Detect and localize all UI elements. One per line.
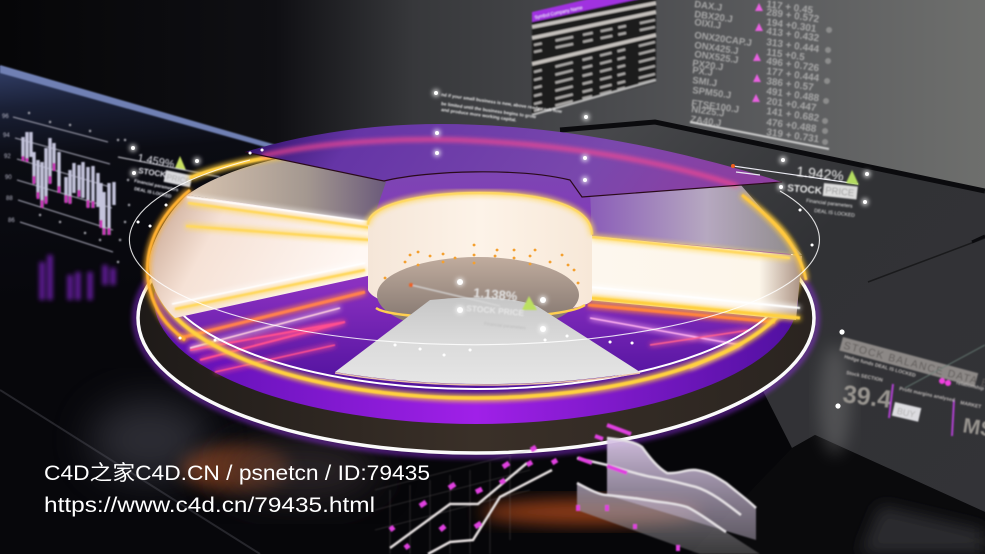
axis labels: 94 bbox=[3, 133, 10, 139]
leader bbox=[411, 285, 500, 306]
bottom left line charts bbox=[375, 447, 557, 554]
line 3: and produce more working capital. bbox=[441, 107, 517, 123]
bottom rule bbox=[532, 80, 656, 115]
grid dots bbox=[29, 113, 129, 262]
magenta points bbox=[390, 447, 557, 548]
values: 289 + 0.572 bbox=[766, 7, 820, 25]
values: 476 +0.488 bbox=[766, 117, 817, 135]
header text: Symbol Company Name bbox=[534, 5, 583, 20]
values: 319 + 0.731 bbox=[766, 127, 820, 145]
dotted orbit ring bbox=[129, 150, 819, 355]
status circles bbox=[825, 30, 829, 142]
names: SPM50.J bbox=[692, 85, 732, 101]
watermark line one: C4D之家C4D.CN / psnetcn / ID:79435 bbox=[44, 462, 430, 485]
slice: right edge lines bbox=[590, 195, 806, 318]
area line two bbox=[577, 458, 741, 515]
stock text: STOCK bbox=[138, 166, 167, 179]
reflected candles bbox=[42, 255, 113, 300]
chart grid bbox=[375, 450, 530, 554]
inner cylinder bbox=[368, 192, 592, 333]
watermark bbox=[44, 462, 430, 517]
glow markers bbox=[130, 90, 870, 409]
left candlestick chart bbox=[2, 113, 129, 262]
table body bbox=[532, 0, 656, 116]
caption: Financial parameters bbox=[484, 321, 527, 330]
slice: left cream face bbox=[149, 195, 372, 318]
subtitle: Hedge funds DEAL IS LOCKED bbox=[843, 354, 917, 379]
names: SMI.J bbox=[692, 75, 718, 89]
market label: MARKET bbox=[960, 400, 982, 410]
magenta marker bbox=[942, 381, 948, 383]
names: ONX20CAP.J bbox=[694, 30, 752, 49]
line 2: be limited until the business begins to grow bbox=[441, 101, 537, 119]
thin diagonal line bbox=[905, 345, 985, 388]
white cylinder ring bbox=[376, 305, 585, 318]
stock balance panel bbox=[839, 337, 985, 442]
slice: left top face bbox=[187, 156, 386, 222]
up triangle bbox=[522, 296, 537, 310]
trailing label: relationship bbox=[956, 380, 985, 392]
candles bbox=[23, 132, 114, 235]
leader line bbox=[118, 157, 220, 177]
leader line bbox=[733, 166, 858, 184]
values: 496 + 0.726 bbox=[766, 56, 820, 74]
watermark line two: https://www.c4d.cn/79435.html bbox=[44, 494, 375, 517]
magenta triangles bbox=[752, 3, 763, 102]
panel: right floor plate bbox=[560, 122, 985, 512]
small caption: Financial parameters bbox=[134, 178, 179, 192]
data table bbox=[532, 0, 662, 116]
white trapezoid slice bbox=[335, 298, 640, 385]
axis labels: 86 bbox=[8, 218, 15, 224]
value: 1.459% bbox=[136, 152, 176, 171]
stock text: STOCK bbox=[787, 183, 823, 197]
value: 1.942% bbox=[796, 163, 845, 184]
stock text: STOCK PRICE bbox=[466, 303, 525, 318]
inner well bbox=[377, 257, 579, 333]
up triangle bbox=[846, 170, 859, 185]
orbit dots bbox=[138, 150, 812, 355]
line 1: nd if your small business is new, above ready cash flow bbox=[441, 92, 563, 114]
bottom right area charts bbox=[577, 425, 760, 554]
small caption: Financial parameters bbox=[806, 198, 853, 210]
disc: floor glow lines bbox=[180, 292, 775, 372]
top purple slice bbox=[245, 124, 858, 197]
slice: left edge lines bbox=[147, 155, 372, 340]
profit label: Profit margins analysed bbox=[899, 386, 955, 404]
axis labels: 90 bbox=[5, 175, 12, 181]
names bbox=[690, 0, 752, 129]
candle bases bbox=[23, 156, 109, 235]
disc: base rim bbox=[138, 183, 814, 453]
names: DBX20.J bbox=[694, 9, 733, 25]
disc: purple floor bbox=[154, 146, 798, 398]
names: ONX525.J bbox=[694, 49, 739, 66]
orange dot bbox=[731, 164, 735, 168]
label: 1.459% stock bbox=[118, 152, 220, 199]
values: 201 +0.447 bbox=[766, 96, 817, 114]
stock section label: Stock SECTION bbox=[846, 370, 884, 384]
area line one bbox=[607, 438, 756, 508]
upper area fill bbox=[607, 438, 756, 540]
stock list bbox=[690, 0, 829, 149]
price box: PRICE bbox=[825, 185, 855, 199]
orange dot matrix bbox=[385, 245, 578, 283]
names: FTSE100.J bbox=[691, 98, 740, 116]
front edge bbox=[335, 373, 640, 385]
axis labels: 92 bbox=[4, 154, 11, 160]
values: 194 +0.301 bbox=[766, 17, 817, 35]
floor reflections bbox=[90, 345, 851, 525]
slice face bbox=[335, 298, 640, 384]
paragraph text bbox=[441, 92, 563, 123]
purple header bbox=[532, 0, 662, 22]
slab reflection bbox=[860, 505, 985, 554]
names: ZA40.J bbox=[690, 114, 722, 129]
big value: 39.4 bbox=[841, 380, 893, 414]
values: 386 + 0.57 bbox=[766, 76, 815, 94]
panel grooves bbox=[0, 122, 985, 554]
value: 1.138% bbox=[473, 285, 518, 304]
buy button: BUY bbox=[896, 406, 916, 420]
panel: left blue wall bbox=[0, 66, 290, 300]
orange dot bbox=[409, 283, 413, 287]
values: 313 + 0.444 bbox=[766, 37, 820, 55]
disc: purple wall bbox=[154, 176, 798, 424]
values: 413 + 0.432 bbox=[766, 26, 820, 44]
area line three bbox=[577, 483, 726, 532]
values: 141 + 0.682 bbox=[766, 106, 820, 124]
names: PX.J bbox=[692, 65, 714, 79]
up triangle bbox=[175, 156, 186, 170]
magenta segments bbox=[578, 425, 678, 551]
yellow cylinder ring bbox=[368, 193, 592, 235]
row bars bbox=[532, 3, 656, 64]
disc: rim glow bbox=[135, 180, 817, 456]
values: 115 +0.5 bbox=[766, 47, 806, 63]
slice: right cream top face bbox=[590, 184, 802, 255]
panel: lower right dark slab bbox=[690, 435, 985, 554]
buy button bbox=[892, 402, 921, 422]
axis labels: 96 bbox=[2, 114, 9, 120]
row text bbox=[534, 20, 655, 111]
values: 177 + 0.444 bbox=[766, 66, 820, 84]
bottom rule bbox=[690, 122, 829, 149]
names: PX20.J bbox=[692, 58, 724, 73]
panel: dark left floor bbox=[0, 240, 260, 554]
lower edge bbox=[245, 152, 782, 197]
grid lines bbox=[13, 117, 113, 252]
marker cores bbox=[131, 91, 869, 409]
lower band fill bbox=[577, 483, 760, 554]
divider bbox=[889, 384, 954, 436]
line two bbox=[428, 470, 552, 554]
price box: PRICE bbox=[166, 172, 191, 186]
small caption 2: DEAL IS LOCKED bbox=[134, 186, 173, 199]
slice shape bbox=[245, 124, 782, 197]
slice: right cream wall bbox=[588, 236, 802, 320]
axis labels bbox=[2, 114, 15, 224]
names: ONX425.J bbox=[694, 40, 739, 57]
label: 1.138% stock bbox=[409, 283, 537, 330]
axis labels: 88 bbox=[6, 196, 13, 202]
label: 1.942% stock bbox=[787, 163, 859, 219]
line one bbox=[390, 463, 527, 548]
values bbox=[766, 0, 820, 145]
names: OIXI.J bbox=[694, 17, 722, 32]
disc: white inner rim line bbox=[158, 147, 794, 389]
small caption 2: DEAL IS LOCKED bbox=[814, 208, 856, 219]
magenta glow stripe bbox=[262, 140, 738, 186]
marker halo bbox=[130, 90, 870, 333]
disc: yellow rim line bbox=[154, 146, 798, 398]
left wall highlight edge bbox=[0, 65, 290, 154]
names: NI225.J bbox=[691, 104, 725, 120]
values: 491 + 0.488 bbox=[766, 86, 820, 104]
